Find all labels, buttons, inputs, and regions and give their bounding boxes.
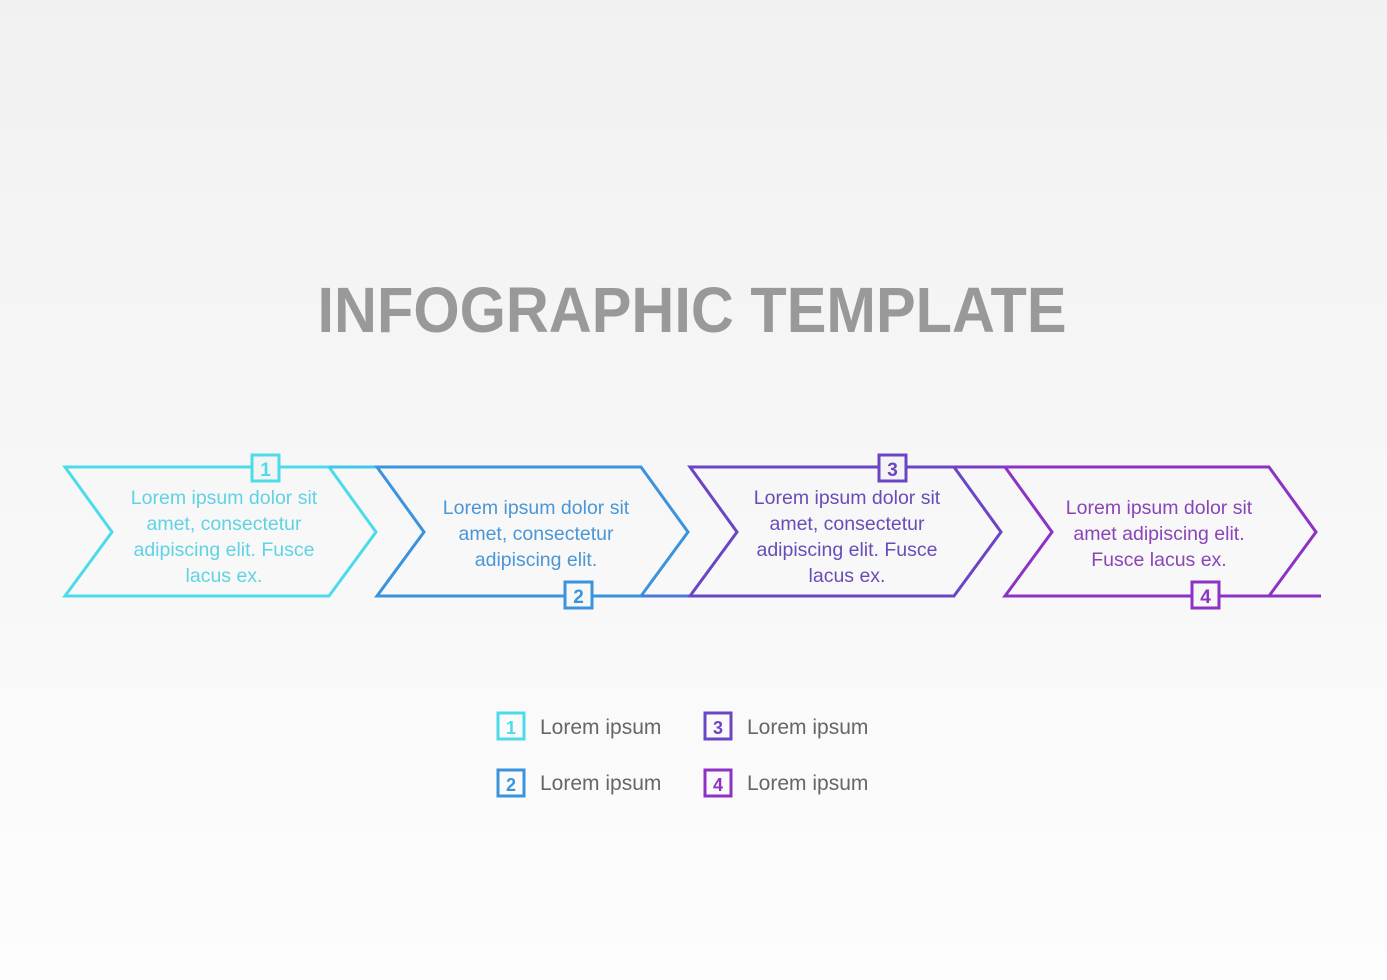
text 2: Lorem ipsum dolor sit: [443, 497, 630, 519]
badge 1: 1: [260, 460, 271, 481]
chevron 4: [1005, 467, 1321, 608]
badge 2: 2: [573, 587, 584, 608]
legend item 4: 4: [713, 775, 723, 795]
title: INFOGRAPHIC TEMPLATE: [318, 274, 1066, 346]
legend item 3: [705, 713, 868, 739]
text 1: Lorem ipsum dolor sit: [131, 487, 318, 509]
legend item 2: Lorem ipsum: [540, 772, 661, 795]
legend item 4: [705, 770, 868, 796]
text 2: adipiscing elit.: [475, 549, 597, 571]
chevron flow: [65, 455, 1321, 608]
legend item 1: Lorem ipsum: [540, 716, 661, 739]
text 1: lacus ex.: [186, 565, 262, 587]
text 3: lacus ex.: [809, 565, 885, 587]
text 3: amet, consectetur: [770, 513, 925, 535]
legend item 2: 2: [506, 775, 516, 795]
text 1: adipiscing elit. Fusce: [133, 539, 315, 561]
text 4: amet adipiscing elit.: [1073, 523, 1245, 545]
text 2: amet, consectetur: [458, 523, 614, 545]
legend: [498, 713, 868, 796]
legend item 4: Lorem ipsum: [747, 772, 868, 795]
text 1: amet, consectetur: [146, 513, 302, 535]
legend item 2: [498, 770, 661, 796]
text 3: adipiscing elit. Fusce: [756, 539, 938, 561]
badge 4: 4: [1200, 587, 1211, 608]
legend item 1: 1: [506, 718, 516, 738]
badge 3: 3: [887, 460, 898, 481]
badge 3: [879, 455, 906, 481]
legend item 1: [498, 713, 661, 739]
text 4: Fusce lacus ex.: [1091, 549, 1227, 571]
legend item 3: Lorem ipsum: [747, 716, 868, 739]
legend item 3: 3: [713, 718, 723, 738]
badge 4: [1192, 582, 1219, 608]
text 4: Lorem ipsum dolor sit: [1066, 497, 1253, 519]
badge 2: [565, 582, 592, 608]
chevron 1: [65, 455, 378, 596]
chevron 2: [377, 467, 691, 608]
text 3: Lorem ipsum dolor sit: [754, 487, 941, 509]
badge 1: [252, 455, 279, 481]
chevron 3: [690, 455, 1006, 596]
